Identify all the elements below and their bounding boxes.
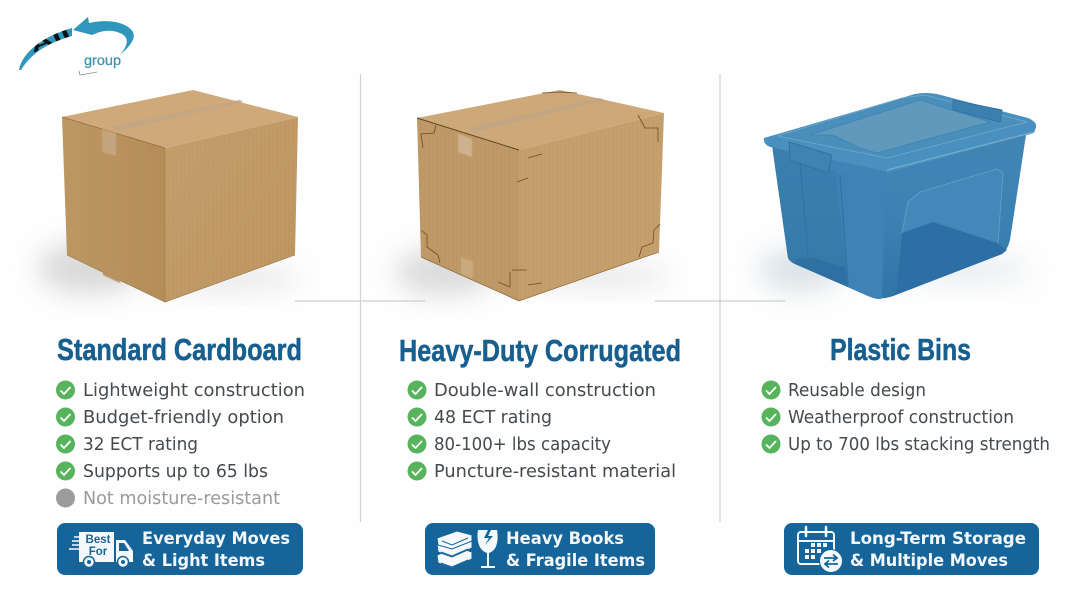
icon: delivery truck: Best xyxy=(86,534,111,546)
panel: plastic bins xyxy=(758,93,1050,575)
feature list: standard cardboard: 32 ECT rating xyxy=(83,434,198,455)
heading: heavy-duty corrugated: Heavy-Duty Corrugated xyxy=(399,333,681,368)
badge: heavy books and fragile items xyxy=(425,523,655,575)
image: heavy-duty corrugated box xyxy=(395,90,670,301)
feature list: plastic bins: Up to 700 lbs stacking strength xyxy=(788,434,1050,455)
badge: everyday moves: & Light Items xyxy=(142,551,265,571)
icon: fragile glass xyxy=(477,530,498,567)
inner floor xyxy=(795,257,848,287)
feature list: plastic bins: Weatherproof construction xyxy=(788,407,1014,428)
image: standard cardboard box xyxy=(38,90,300,302)
badge: heavy books and fragile items: & Fragile Items xyxy=(506,551,645,571)
feature list: heavy-duty corrugated: Puncture-resistant material xyxy=(434,461,676,482)
icon: delivery truck: For xyxy=(89,546,108,558)
column dividers xyxy=(295,74,785,522)
icon: calendar with exchange arrows xyxy=(798,527,842,572)
panel: heavy-duty corrugated xyxy=(395,90,681,575)
feature list: standard cardboard xyxy=(56,380,305,509)
logo: group xyxy=(84,52,121,68)
badge: heavy books and fragile items: Heavy Books xyxy=(506,529,624,549)
badge: everyday moves: Everyday Moves xyxy=(142,529,290,549)
feature list: heavy-duty corrugated: Double-wall construction xyxy=(434,380,656,401)
panel: standard cardboard xyxy=(38,90,305,575)
badge: long-term storage xyxy=(784,523,1039,575)
feature list: plastic bins xyxy=(762,380,1050,455)
feature list: standard cardboard: Budget-friendly option xyxy=(83,407,284,428)
feature list: heavy-duty corrugated: 48 ECT rating xyxy=(434,407,552,428)
feature list: plastic bins: Reusable design xyxy=(788,380,926,401)
badge: everyday moves xyxy=(57,523,303,575)
logo: All xyxy=(27,22,73,57)
badge: long-term storage: & Multiple Moves xyxy=(850,551,1008,571)
feature list: heavy-duty corrugated: 80-100+ lbs capacity xyxy=(434,434,611,455)
image: blue plastic bin xyxy=(758,93,1036,299)
feature list: standard cardboard: Supports up to 65 lbs xyxy=(83,461,268,482)
feature list: standard cardboard: Not moisture-resistant xyxy=(83,488,280,509)
feature list: heavy-duty corrugated xyxy=(408,380,676,482)
heading: plastic bins: Plastic Bins xyxy=(830,332,971,367)
latches xyxy=(789,142,832,173)
heading: standard cardboard: Standard Cardboard xyxy=(57,332,302,367)
feature list: standard cardboard: Lightweight construction xyxy=(83,380,305,401)
lid xyxy=(764,93,1036,172)
bin body xyxy=(772,100,1026,298)
icon: delivery truck xyxy=(69,532,133,568)
icon: stacked books xyxy=(437,531,472,568)
window recess xyxy=(902,169,1003,243)
badge: long-term storage: Long-Term Storage xyxy=(850,529,1026,549)
logo xyxy=(19,17,134,75)
